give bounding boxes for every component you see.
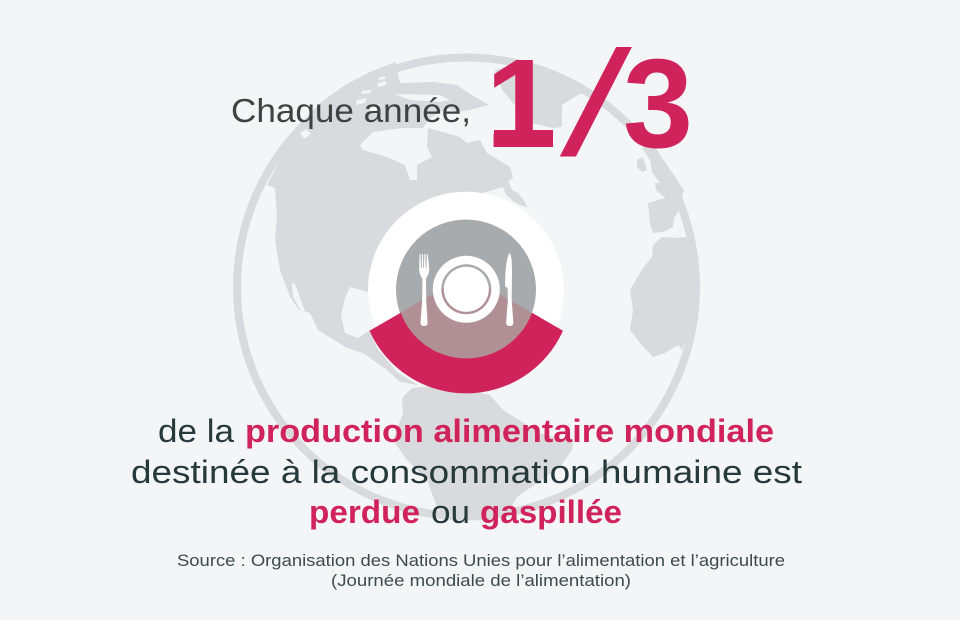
continent: Europe — [642, 146, 684, 233]
slash: / — [556, 20, 636, 187]
white disc — [368, 192, 564, 388]
statement text — [131, 413, 802, 530]
icon: plate — [433, 256, 500, 323]
pink one-third sector inside disc — [400, 275, 532, 359]
line 3: ou — [431, 494, 470, 530]
source note: (Journée mondiale de l’alimentation) — [331, 571, 631, 590]
line 3: gaspillée — [480, 494, 622, 530]
grey inner disc — [396, 220, 536, 360]
numeral 1: 1 — [486, 33, 556, 174]
continent: Greenland — [495, 64, 592, 128]
globe outline ring — [237, 58, 696, 516]
island: Newfoundland — [503, 181, 527, 207]
icon: knife — [505, 253, 513, 326]
globe map background — [237, 58, 696, 517]
numeral 3: 3 — [623, 33, 693, 174]
island: Great Britain — [637, 157, 647, 172]
arctic channels between islands — [300, 76, 450, 139]
line 3: perdue — [309, 494, 420, 530]
big figure: 1/3 — [486, 20, 693, 187]
source note: Source : Organisation des Nations Unies pour l’alimentation et l’agriculture — [177, 551, 785, 570]
icon: fork — [419, 254, 429, 326]
central plate emblem — [368, 192, 564, 393]
heading: Chaque année: Chaque année, — [231, 92, 471, 129]
line 3 — [309, 494, 622, 530]
source note — [177, 551, 785, 590]
line 1: de la — [158, 413, 234, 449]
continent: North America — [267, 62, 513, 385]
Gulf of California sliver — [292, 283, 306, 317]
line 2: destinée à la consommation humaine est — [131, 454, 802, 490]
line 1: production alimentaire mondiale — [245, 413, 774, 449]
red one-third arc — [370, 313, 563, 393]
continent: South America — [393, 385, 573, 517]
continent: Africa — [630, 237, 696, 357]
